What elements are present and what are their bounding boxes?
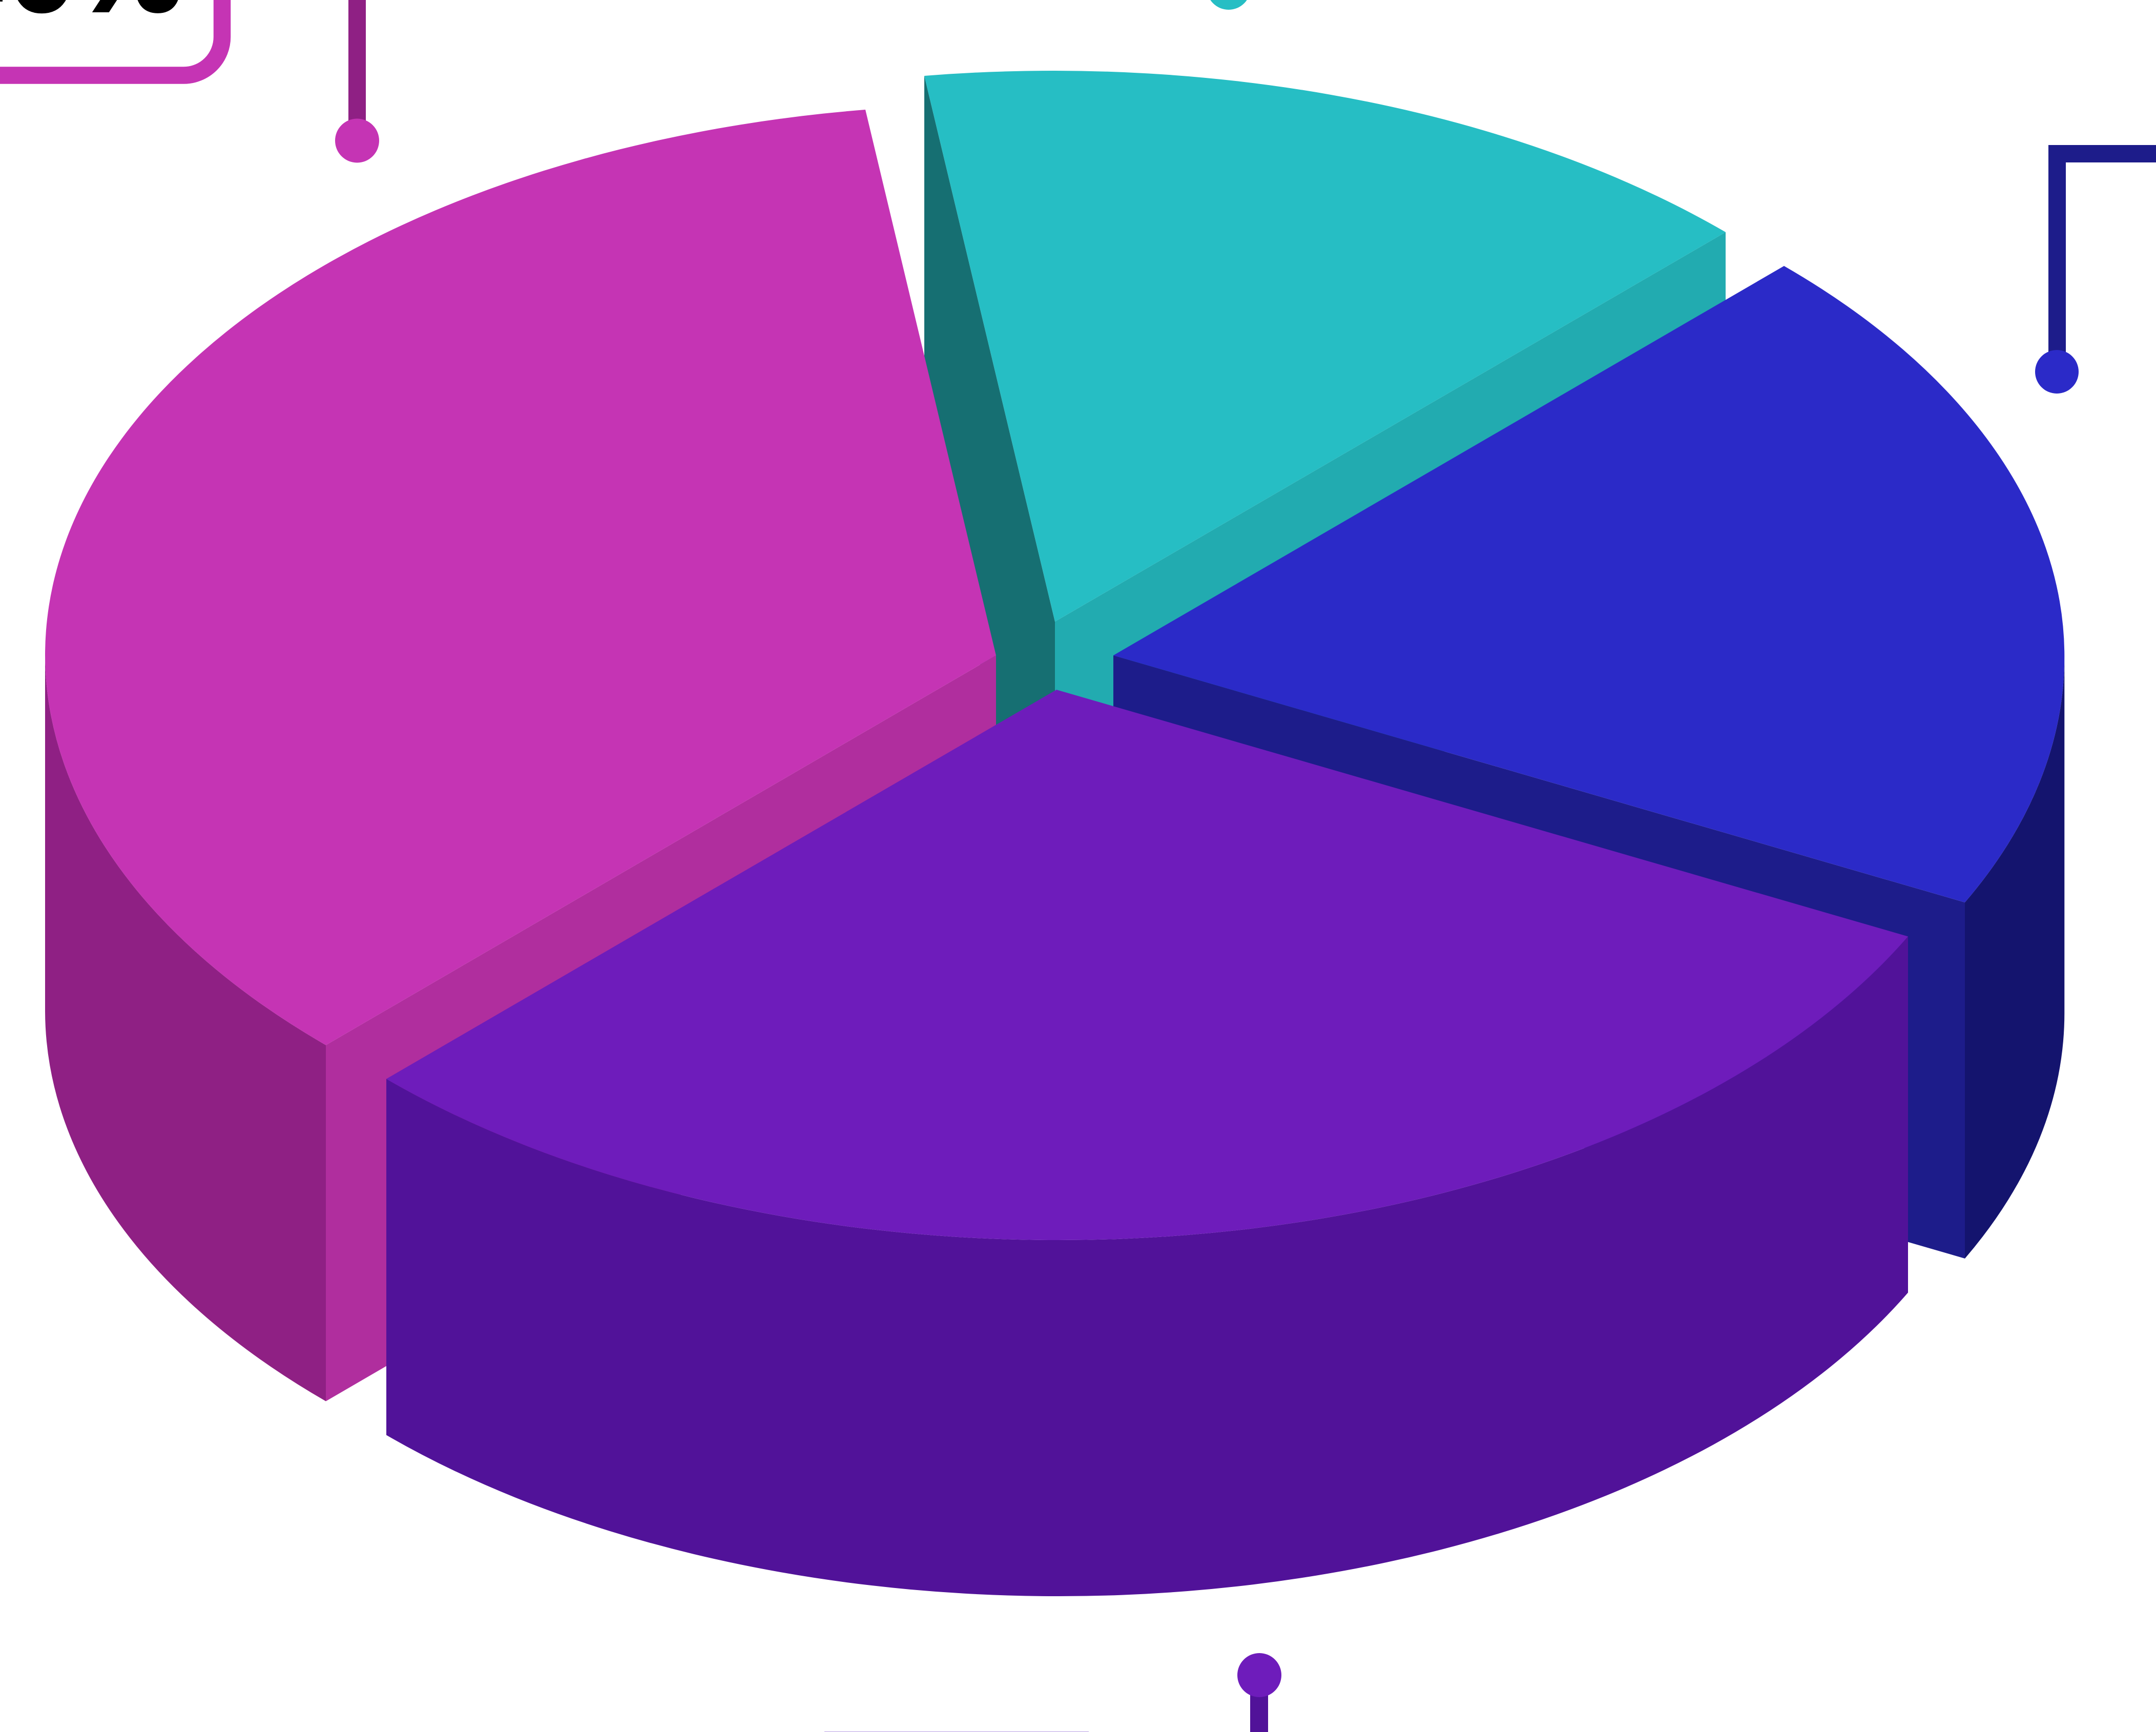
blue outer wall <box>1965 655 2064 1259</box>
magenta outer wall <box>45 655 326 1401</box>
frame border <box>0 0 222 75</box>
purple outer wall <box>386 937 1908 1596</box>
purple top <box>386 690 1908 1240</box>
leader: purple slice <box>1237 1653 1281 1732</box>
callout: purple frame top edge <box>824 1731 1089 1732</box>
slice: blue <box>1113 266 2064 1259</box>
slice: purple <box>386 690 1908 1596</box>
teal top <box>924 71 1726 622</box>
slice: teal <box>924 71 1726 978</box>
magenta top <box>45 110 996 1045</box>
magenta cut face <box>326 655 996 1401</box>
teal left cut face <box>924 76 1055 978</box>
blue top <box>1113 266 2064 902</box>
slice: magenta <box>45 110 996 1401</box>
leader: blue slice <box>2035 154 2156 394</box>
callout: magenta percentage frame <box>0 0 222 75</box>
leader: teal slice <box>1207 0 1251 10</box>
teal right cut face <box>1055 232 1726 978</box>
leader: magenta slice <box>335 0 379 163</box>
blue cut face <box>1113 655 1965 1259</box>
